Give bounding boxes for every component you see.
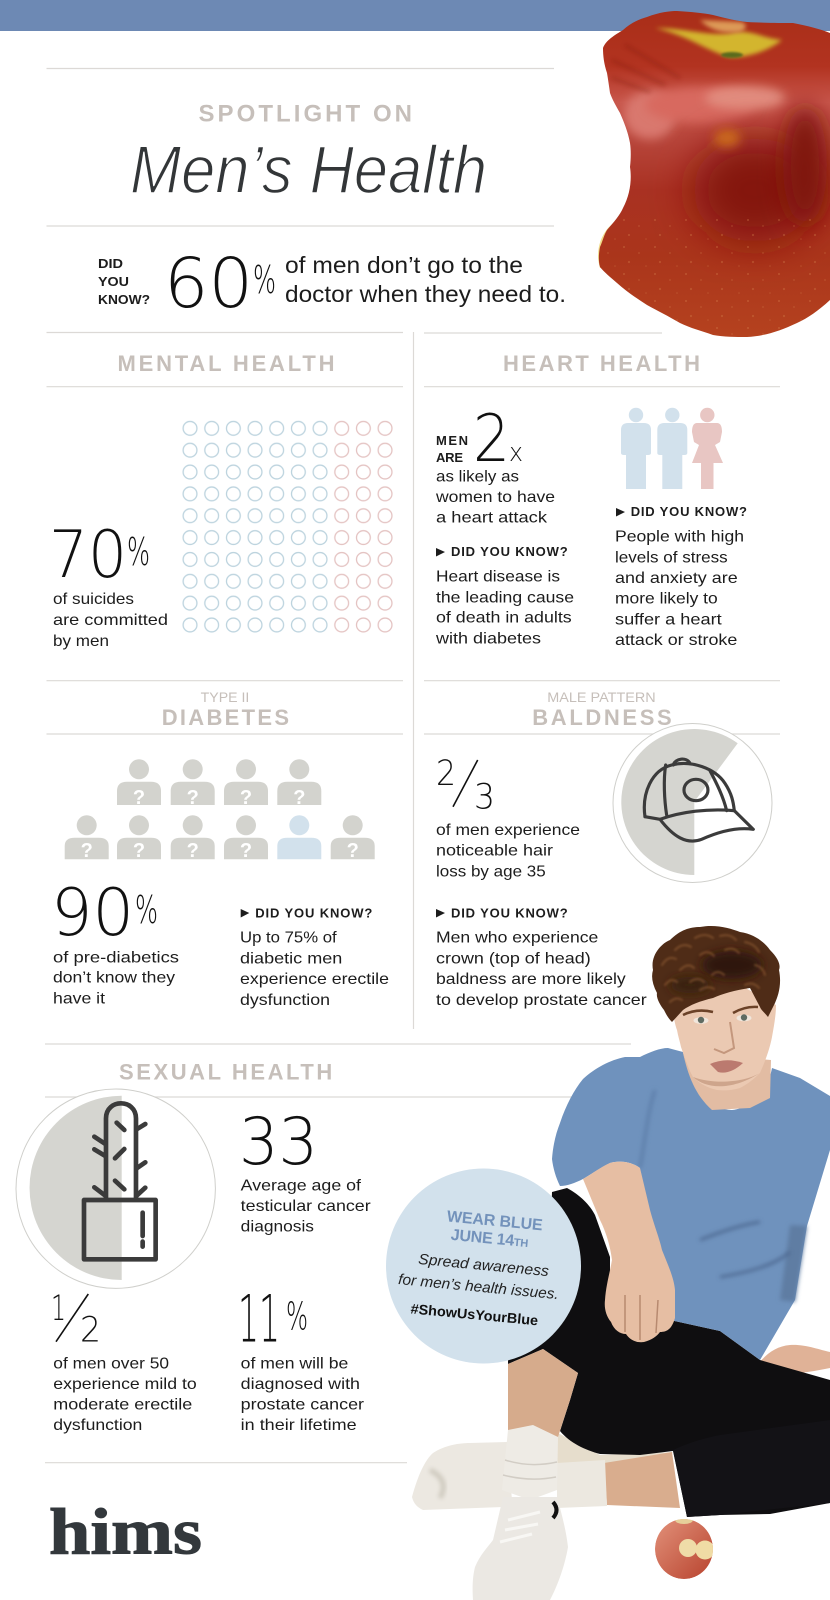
text: hair loss: of men experience bbox=[436, 822, 580, 839]
heading: heart health: HEART HEALTH bbox=[503, 351, 700, 376]
left white shoe bbox=[412, 1442, 512, 1510]
chart: people with question marks: ? bbox=[133, 787, 145, 809]
stat: men are 2x: MEN bbox=[436, 433, 468, 448]
text: heart attack: women to have bbox=[435, 489, 555, 506]
heading: type II diabetes: DIABETES bbox=[162, 705, 289, 730]
floor shade bbox=[556, 1432, 675, 1466]
stat: men are 2x: ARE bbox=[436, 450, 463, 465]
did you know 60%: of men don’t go to the bbox=[285, 252, 523, 278]
panel: mental health: % bbox=[127, 530, 150, 574]
callout: did you know, stress: more likely to bbox=[615, 590, 718, 608]
badge heading: WEAR BLUE bbox=[446, 1208, 544, 1234]
chart: people with question marks: ? bbox=[240, 787, 252, 809]
did you know 60% bbox=[98, 244, 566, 324]
callout: did you know, stress: levels of stress bbox=[615, 549, 728, 566]
kicker: spotlight on: SPOTLIGHT ON bbox=[198, 101, 412, 128]
neck bbox=[683, 1053, 771, 1110]
panel: heart health bbox=[424, 333, 780, 649]
panel: sexual health bbox=[16, 1044, 631, 1463]
stat: two thirds: 2 bbox=[436, 754, 456, 794]
chart: people with question marks: ? bbox=[81, 840, 93, 862]
photo: seated man in blue shirt bbox=[412, 926, 830, 1600]
forearm and hand bbox=[583, 1162, 675, 1342]
heading: male pattern baldness bbox=[532, 690, 672, 730]
stat: 90 percent: 90 bbox=[51, 876, 134, 951]
stat: 11 percent: 11 bbox=[238, 1283, 280, 1358]
callout: did you know, diabetes bbox=[435, 544, 574, 647]
text: testicular cancer: Average age of bbox=[241, 1178, 362, 1195]
top colour band bbox=[0, 0, 830, 31]
did you know 60%: doctor when they need to. bbox=[285, 281, 566, 307]
badge text bbox=[398, 1249, 562, 1303]
chart: 100 circle pictogram bbox=[179, 417, 396, 636]
text: testicular cancer: testicular cancer bbox=[241, 1198, 371, 1215]
heading: sexual health: SEXUAL HEALTH bbox=[119, 1059, 332, 1084]
callout: did you know, diabetes: Heart disease is bbox=[436, 569, 560, 586]
badge text: Spread awareness bbox=[418, 1251, 550, 1280]
text: suicides: are committed bbox=[53, 612, 168, 629]
panel: type II diabetes bbox=[46, 681, 403, 1009]
black trousers bbox=[508, 1188, 830, 1517]
text: heart attack: as likely as bbox=[436, 469, 519, 486]
callout: did you know, diabetes: of death in adults bbox=[436, 610, 572, 627]
callout: did you know, dysfunction: Up to 75% of bbox=[240, 930, 337, 947]
callout: did you know, stress: suffer a heart bbox=[615, 611, 722, 628]
text: hair loss: noticeable hair bbox=[436, 843, 554, 860]
panel: type II diabetes: % bbox=[135, 888, 158, 932]
panel: mental health bbox=[46, 332, 403, 650]
text: prostate cancer bbox=[241, 1355, 365, 1434]
chart: people with question marks: ? bbox=[293, 787, 305, 809]
callout: did you know, crown baldness: DID YOU KNOW? bbox=[451, 905, 568, 920]
did you know 60%: % bbox=[253, 258, 276, 302]
text: heart attack bbox=[435, 469, 555, 527]
chart: people with question marks bbox=[65, 759, 375, 862]
chart: people with question marks: ? bbox=[187, 840, 199, 862]
chart: people with question marks: ? bbox=[133, 840, 145, 862]
heading: type II diabetes bbox=[162, 690, 289, 730]
callout: did you know, stress: People with high bbox=[615, 529, 744, 546]
text: prostate cancer: of men will be bbox=[241, 1355, 348, 1372]
callout: did you know, crown baldness bbox=[436, 905, 647, 1009]
callout: did you know, dysfunction: DID YOU KNOW? bbox=[255, 905, 372, 920]
text: erectile dysfunction: moderate erectile bbox=[53, 1396, 192, 1413]
heading: type II diabetes: TYPE II bbox=[201, 690, 249, 705]
heading: male pattern baldness: MALE PATTERN bbox=[547, 690, 656, 705]
hashtag: #ShowUsYourBlue bbox=[410, 1300, 539, 1328]
lower ankle bbox=[604, 1452, 680, 1508]
callout: did you know, diabetes: DID YOU KNOW? bbox=[451, 544, 568, 559]
text: suicides: by men bbox=[53, 633, 109, 650]
badge heading: JUNE 14TH bbox=[450, 1227, 529, 1251]
text: prostate cancer: diagnosed with bbox=[241, 1376, 360, 1393]
floor apple bbox=[655, 1516, 714, 1579]
text: pre-diabetics bbox=[53, 949, 179, 1007]
text: suicides: of suicides bbox=[53, 591, 134, 608]
text: testicular cancer: diagnosis bbox=[241, 1219, 314, 1236]
stat: one half bbox=[51, 1289, 101, 1351]
header block bbox=[46, 68, 554, 226]
did you know 60%: DID bbox=[98, 256, 123, 271]
callout: did you know, stress bbox=[615, 504, 747, 649]
did you know 60%: KNOW? bbox=[98, 292, 150, 307]
stat: men are 2x bbox=[436, 402, 523, 477]
stat: 60 percent: 60 bbox=[164, 244, 253, 324]
photo: bitten red apple bbox=[590, 0, 830, 345]
callout: did you know, diabetes: with diabetes bbox=[435, 630, 541, 647]
text: pre-diabetics: of pre-diabetics bbox=[53, 949, 179, 966]
heading: male pattern baldness: BALDNESS bbox=[532, 705, 672, 730]
stat: men are 2x: 2 bbox=[473, 402, 510, 477]
callout: did you know, dysfunction: diabetic men bbox=[240, 950, 342, 967]
callout: did you know, diabetes: the leading cause bbox=[436, 589, 574, 606]
hair bbox=[652, 926, 780, 1022]
stat: one half: 2 bbox=[80, 1311, 101, 1351]
blue shirt bbox=[552, 1048, 830, 1360]
callout: did you know, crown baldness: to develop prostate cancer bbox=[436, 992, 647, 1009]
callout: wear blue badge bbox=[386, 1168, 581, 1364]
callout: did you know, crown baldness: crown (top of head) bbox=[436, 950, 591, 967]
badge heading bbox=[444, 1208, 544, 1252]
text: prostate cancer: prostate cancer bbox=[241, 1396, 365, 1413]
text: erectile dysfunction: dysfunction bbox=[53, 1417, 142, 1434]
chart: people with question marks: ? bbox=[187, 787, 199, 809]
text: erectile dysfunction: experience mild to bbox=[53, 1376, 197, 1393]
callout: did you know, stress: attack or stroke bbox=[615, 632, 737, 649]
text: prostate cancer: in their lifetime bbox=[241, 1417, 357, 1434]
text: hair loss bbox=[436, 822, 580, 881]
icon: two men and one woman bbox=[621, 408, 723, 489]
panel: sexual health: % bbox=[286, 1294, 308, 1338]
callout: did you know, dysfunction bbox=[240, 905, 389, 1009]
chart: people with question marks: ? bbox=[240, 840, 252, 862]
title: Men’s Health bbox=[130, 132, 487, 208]
upright sock bbox=[502, 1425, 558, 1500]
icon: cactus in half pie bbox=[16, 1089, 215, 1288]
stat: two thirds: 3 bbox=[474, 777, 495, 817]
text: erectile dysfunction: of men over 50 bbox=[53, 1355, 169, 1372]
text: testicular cancer bbox=[241, 1178, 371, 1236]
panel: male pattern baldness bbox=[424, 681, 780, 1009]
did you know 60%: YOU bbox=[98, 274, 129, 289]
stat: two thirds bbox=[436, 754, 495, 817]
text: pre-diabetics: don’t know they bbox=[53, 970, 175, 987]
text: pre-diabetics: have it bbox=[53, 990, 106, 1007]
hand on floor bbox=[760, 1345, 830, 1376]
badge text: for men’s health issues. bbox=[398, 1271, 559, 1303]
stat: men are 2x: x bbox=[509, 438, 523, 468]
heading: mental health: MENTAL HEALTH bbox=[118, 351, 334, 376]
front white shoe bbox=[473, 1497, 568, 1600]
logo: hims: hims bbox=[49, 1495, 202, 1568]
callout: did you know, dysfunction: dysfunction bbox=[240, 992, 330, 1009]
brows, eyes, nose and lips bbox=[683, 1007, 758, 1073]
chart: people with question marks: ? bbox=[347, 840, 359, 862]
upright shin bbox=[508, 1349, 578, 1437]
callout: did you know, crown baldness: Men who experience bbox=[436, 930, 598, 947]
text: suicides bbox=[53, 591, 168, 650]
callout: did you know, dysfunction: experience erectile bbox=[240, 971, 389, 988]
callout: did you know, crown baldness: baldness are more likely bbox=[436, 971, 626, 988]
callout: did you know, stress: DID YOU KNOW? bbox=[631, 504, 747, 519]
text: hair loss: loss by age 35 bbox=[436, 864, 546, 881]
callout: did you know, stress: and anxiety are bbox=[615, 570, 738, 587]
stat: one half: 1 bbox=[51, 1289, 66, 1329]
text: erectile dysfunction bbox=[53, 1355, 197, 1434]
text: heart attack: a heart attack bbox=[436, 510, 548, 527]
stat: 70 percent: 70 bbox=[49, 518, 127, 593]
icon: cap in two-thirds pie bbox=[613, 724, 772, 882]
face bbox=[673, 985, 776, 1090]
stat: 33: 33 bbox=[239, 1105, 318, 1180]
horizontal sock bbox=[557, 1460, 607, 1508]
